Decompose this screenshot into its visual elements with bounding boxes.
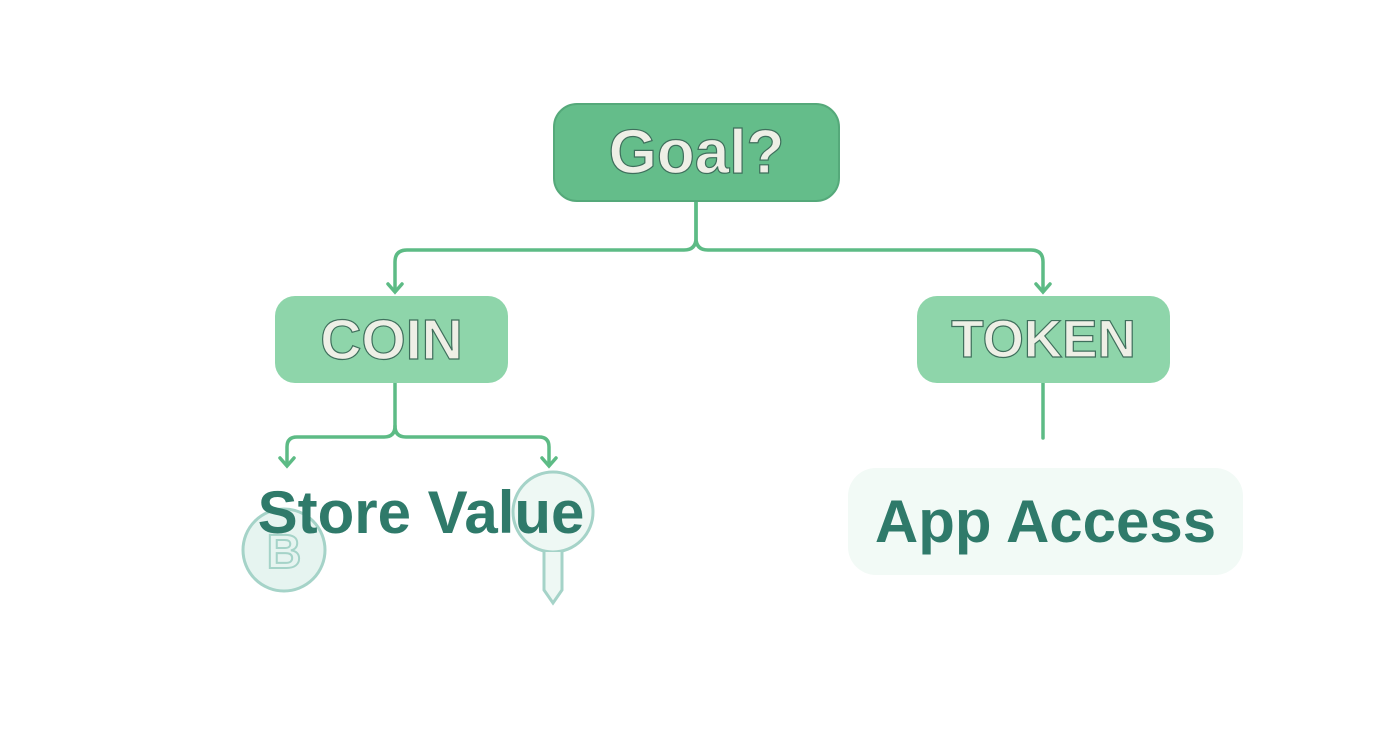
coin box bbox=[275, 296, 508, 383]
coin box: COIN bbox=[320, 308, 463, 372]
icon: key bbox=[512, 470, 594, 606]
panel: app access bbox=[848, 468, 1243, 575]
goal box bbox=[553, 103, 840, 202]
goal box: Goal? bbox=[609, 118, 784, 187]
text: store value: Store Value bbox=[258, 479, 584, 546]
token box: TOKEN bbox=[951, 310, 1136, 369]
token box bbox=[917, 296, 1170, 383]
icon: bitcoin coin bbox=[242, 508, 326, 592]
icon: bitcoin coin: B bbox=[267, 526, 301, 579]
panel: app access: App Access bbox=[875, 488, 1216, 555]
